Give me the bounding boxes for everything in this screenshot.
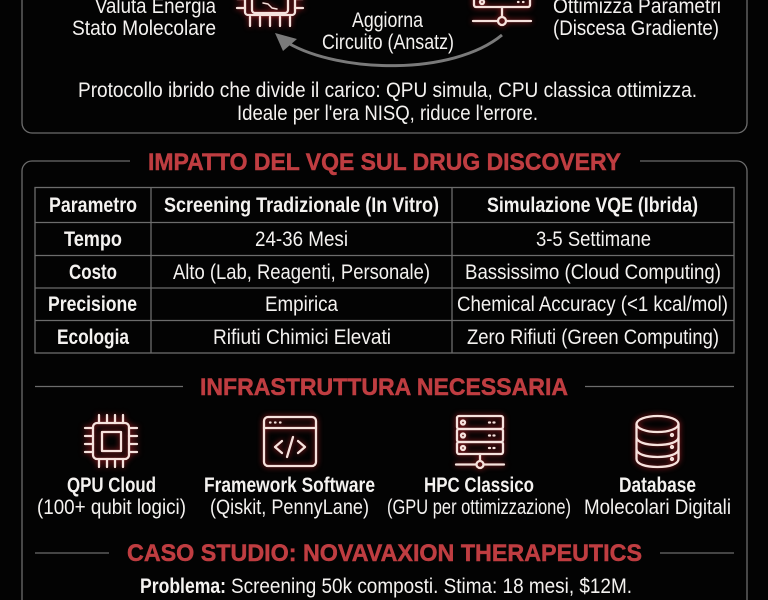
text: update circuit label: Circuito (Ansatz) [322,31,454,54]
label: framework software [204,474,375,519]
table row: cost: Bassissimo (Cloud Computing) [465,261,721,284]
label: HPC classic: HPC Classico [424,474,534,497]
label: molecular database [584,474,731,519]
table row: ecology [57,326,719,349]
text: quantum step label: Stato Molecolare [72,17,216,40]
panel: VQE impact and infrastructure [22,149,747,600]
table row: precision: Precisione [48,293,137,316]
heading: impact: IMPATTO DEL VQE SUL DRUG DISCOVERY [148,149,621,176]
table row: ecology: Ecologia [57,326,129,349]
heading: case study: CASO STUDIO: NOVAVAXION THERAPEUTICS [127,540,642,567]
label: QPU cloud: QPU Cloud [67,474,156,497]
table row: cost [69,261,721,284]
text: update circuit label: Aggiorna [352,9,423,32]
text: classical step label: (Discesa Gradiente) [553,17,719,40]
icon: HPC server [456,416,504,468]
label: molecular database: Molecolari Digitali [584,496,731,519]
icon: database [636,416,678,467]
table header row [49,194,698,217]
table row: time: 24-36 Mesi [255,228,348,251]
label: QPU cloud [37,474,186,519]
label: molecular database: Database [619,474,696,497]
text: case study problem: Screening 50k composti. Stima: 18 mesi, $12M. [231,575,632,598]
table header row: Parametro [49,194,137,217]
table row: time: 3-5 Settimane [536,228,651,251]
table row: ecology: Zero Rifiuti (Green Computing) [467,326,719,349]
text: case study problem: Problema: [140,575,226,598]
table: comparison [35,188,734,353]
icon: QPU chip [85,415,137,467]
table header row: Screening Tradizionale (In Vitro) [164,194,439,217]
text: protocol description [78,79,697,125]
arrow: feedback loop [275,33,502,66]
table row: ecology: Rifiuti Chimici Elevati [213,326,391,349]
label: HPC classic [387,474,571,519]
label: QPU cloud: (100+ qubit logici) [37,496,186,519]
panel: VQE hybrid protocol [22,0,747,133]
table row: time: Tempo [64,228,122,251]
text: protocol description: Ideale per l'era NISQ, riduce l'errore. [237,102,538,125]
table header row: Simulazione VQE (Ibrida) [487,194,698,217]
table row: cost: Alto (Lab, Reagenti, Personale) [173,261,430,284]
text: quantum step label [72,0,216,40]
table row: time [64,228,651,251]
text: update circuit label [322,9,454,54]
icon: classical server [473,0,531,25]
icon: quantum chip [237,0,303,26]
icon: software window [264,417,316,466]
table row: precision: Chemical Accuracy (<1 kcal/mol) [457,293,728,316]
label: HPC classic: (GPU per ottimizzazione) [387,496,571,519]
table row: cost: Costo [69,261,117,284]
label: framework software: (Qiskit, PennyLane) [210,496,369,519]
text: classical step label [553,0,721,40]
label: framework software: Framework Software [204,474,375,497]
heading: infrastructure: INFRASTRUTTURA NECESSARIA [200,374,568,401]
table row: precision [48,293,728,316]
table row: precision: Empirica [265,293,338,316]
text: protocol description: Protocollo ibrido che divide il carico: QPU simula, CPU classica ottimizza. [78,79,697,102]
